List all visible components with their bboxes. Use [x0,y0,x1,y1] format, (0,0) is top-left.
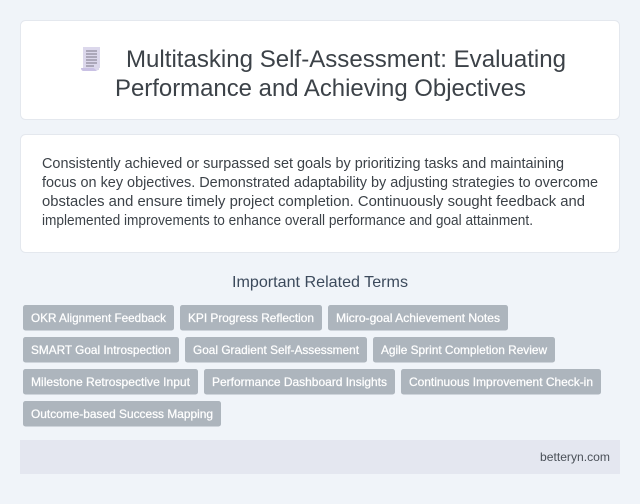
term tags [23,305,601,426]
summary text: Consistently achieved or surpassed set goals by prioritizing tasks and maintaining [42,156,564,172]
tag: Milestone [23,369,198,394]
tag: SMART: SMART Goal Introspection [31,343,171,357]
summary text: focus on key objectives. Demonstrated adaptability by adjusting strategies to overcome [42,175,598,191]
tag: Milestone: Milestone Retrospective Input [31,375,191,389]
tag: Micro-goal: Micro-goal Achievement Notes [336,311,500,325]
tag: Continuous [401,369,601,394]
tag: KPI [180,305,322,330]
tag: Outcome [23,401,221,426]
icon: document scroll [81,47,100,71]
summary text: obstacles and ensure timely project completion. Continuously sought feedback and [42,194,585,210]
title heading: Multitasking Self-Assessment: Evaluating [126,46,566,73]
tag: OKR [23,305,174,330]
tag: Goal Gradient: Goal Gradient Self-Assessment [193,343,360,357]
summary panel [20,134,620,252]
tag: Dashboard: Performance Dashboard Insights [212,375,387,389]
footer source: betteryn.com [540,450,610,464]
tag: Dashboard [204,369,395,394]
section heading: related terms: Important Related Terms [232,274,408,291]
tag: OKR: OKR Alignment Feedback [31,311,167,325]
footer bar [20,440,620,474]
summary text: implemented improvements to enhance overall performance and goal attainment. [42,213,533,229]
tag: Agile: Agile Sprint Completion Review [381,343,547,357]
tag: Agile [373,337,555,362]
tag: Goal Gradient [185,337,367,362]
tag: Outcome: Outcome-based Success Mapping [31,407,213,421]
summary text [42,156,598,229]
title panel [20,20,620,120]
tag: KPI: KPI Progress Reflection [188,311,314,325]
title heading: Performance and Achieving Objectives [115,75,526,102]
tag: SMART [23,337,179,362]
tag: Continuous: Continuous Improvement Check-in [409,375,593,389]
title heading [115,46,566,102]
tag: Micro-goal [328,305,508,330]
